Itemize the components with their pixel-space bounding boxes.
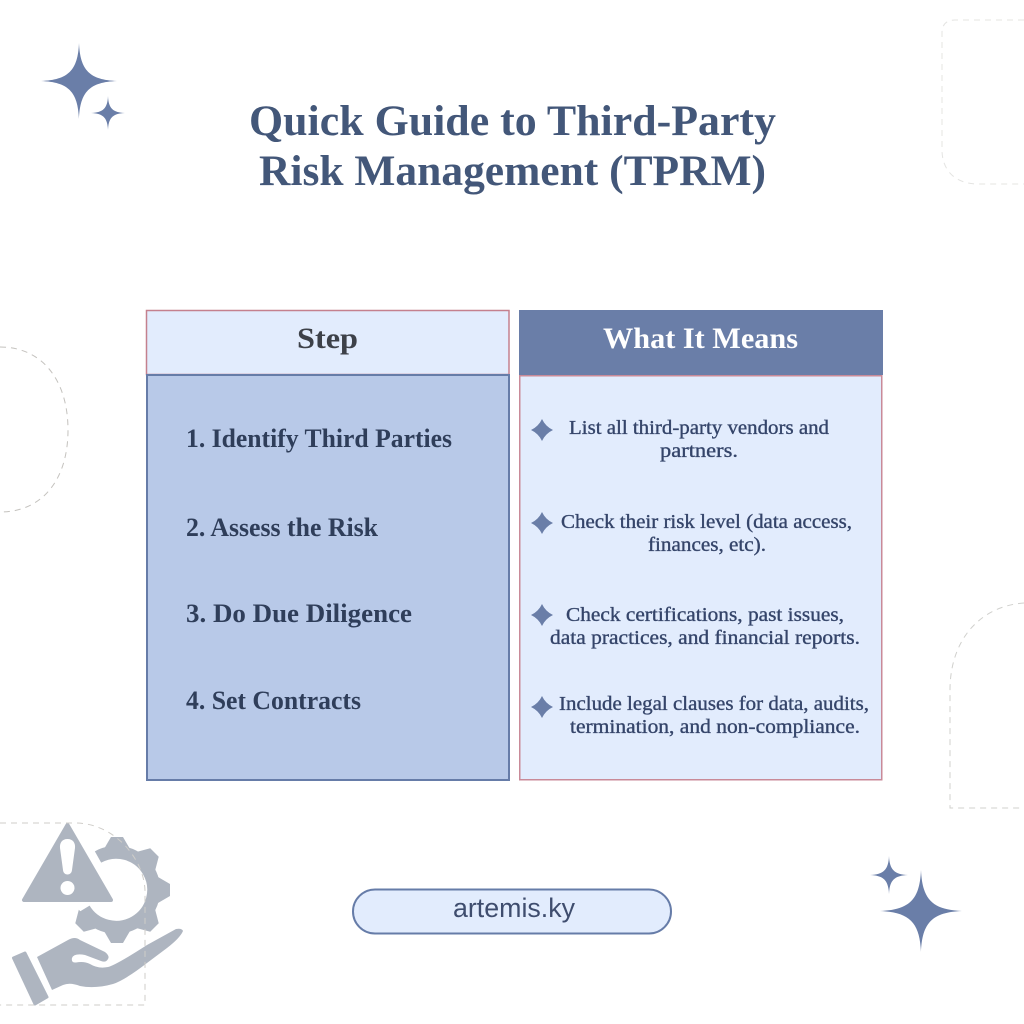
description 4: termination, and non-compliance. [570,717,860,738]
step list: 2. Assess the Risk [186,513,379,542]
step header: Step [297,322,358,355]
panel: what it means column [519,310,883,780]
description 4 [559,694,869,738]
meaning header [519,310,883,375]
description 4: Include legal clauses for data, audits, [559,694,869,715]
description 1: partners. [660,441,738,462]
website pill [353,890,671,934]
description 1: List all third-party vendors and [569,418,829,439]
step list [147,375,509,780]
description 3 [550,605,860,649]
description 3: Check certifications, past issues, [566,605,844,626]
description 3: data practices, and financial reports. [550,628,860,649]
step list: 1. Identify Third Parties [186,424,452,453]
website pill: artemis.ky [453,893,575,923]
icon: bullet 1 [531,419,553,441]
panel: step column [146,310,509,780]
step list: 4. Set Contracts [186,686,361,715]
icon: bullet 3 [531,604,553,626]
meaning header: What It Means [603,322,798,355]
hand [14,929,183,1004]
meaning list [520,376,882,780]
title [249,98,776,195]
icon: bullet 4 [531,696,553,718]
title: Risk Management (TPRM) [259,148,766,195]
icon: sparkles bottom right [870,856,962,952]
description 2 [561,512,852,556]
description 1 [569,418,829,462]
step list: 3. Do Due Diligence [186,599,412,628]
step header [146,310,509,374]
icon: bullet 2 [531,512,553,534]
description 2: Check their risk level (data access, [561,512,852,533]
warning triangle [24,825,111,900]
icon: sparkles top left [41,43,125,130]
description 2: finances, etc). [648,535,766,556]
gear [70,837,170,943]
title: Quick Guide to Third-Party [249,98,776,145]
icon: warning, gear and hand [14,825,183,1004]
